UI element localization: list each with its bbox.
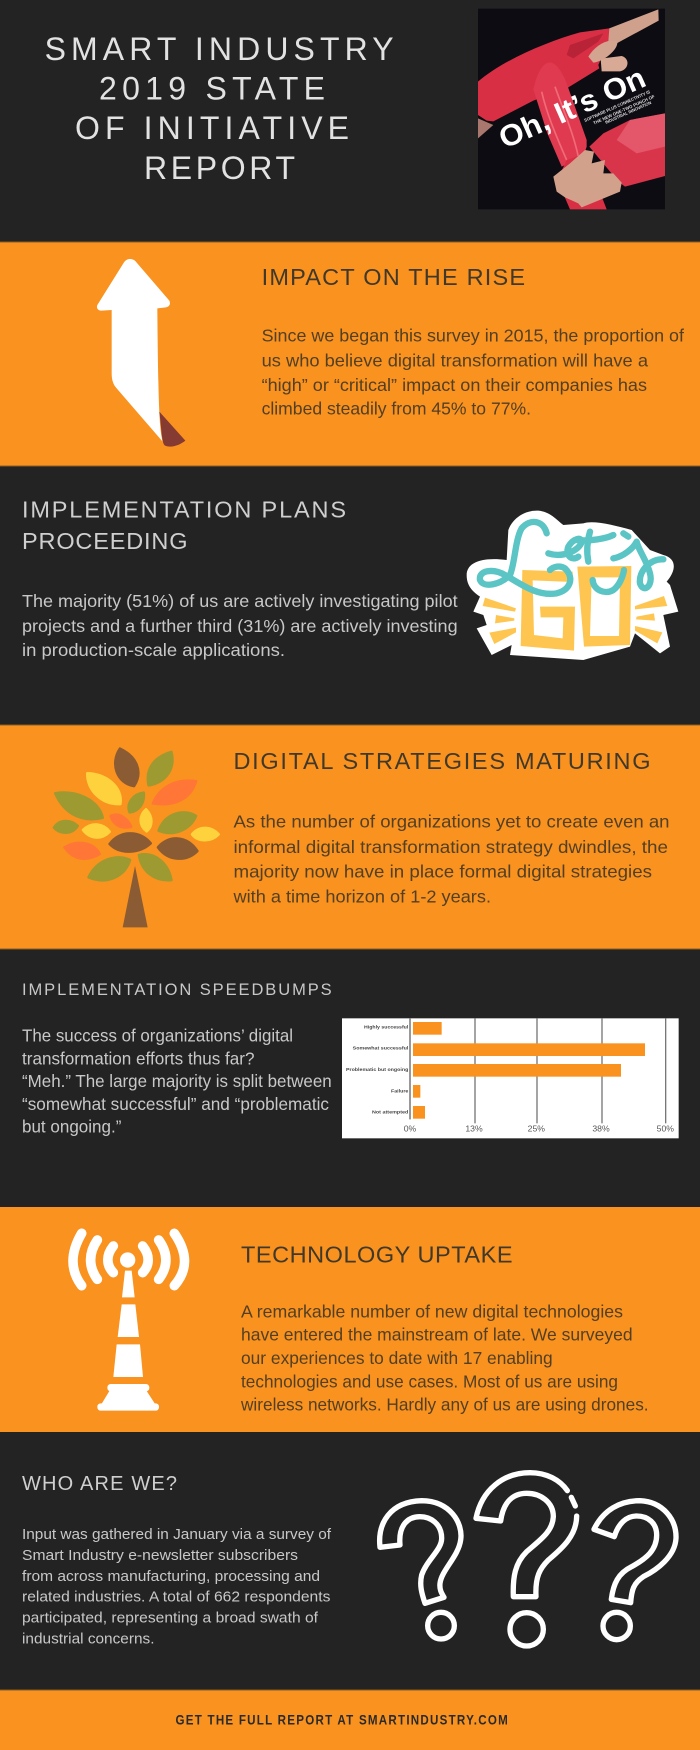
- footer text: GET THE FULL REPORT AT SMARTINDUSTRY.COM: [176, 1712, 509, 1728]
- bar chart: Failure: [391, 1089, 409, 1095]
- text block: projects and a further third (31%) are actively investing: [22, 616, 458, 636]
- text block: [22, 591, 458, 660]
- text block: transformation efforts thus far?: [22, 1048, 255, 1068]
- text block: industrial concerns.: [22, 1630, 154, 1647]
- heading: WHO ARE WE?: [22, 1473, 177, 1495]
- text block: Input was gathered in January via a survey of: [22, 1526, 332, 1543]
- heading: DIGITAL STRATEGIES MATURING: [234, 748, 650, 774]
- text block: [240, 1302, 649, 1415]
- heading: PROCEEDING: [22, 528, 188, 554]
- panel: who are we: [0, 1432, 700, 1690]
- heading: TECHNOLOGY UPTAKE: [241, 1242, 512, 1268]
- bar chart: Not attempted: [372, 1110, 408, 1116]
- text block: [232, 812, 670, 907]
- text block: our experiences to date with 17 enabling: [241, 1348, 553, 1368]
- icon: let's go sticker: [467, 511, 678, 660]
- heading: [22, 497, 346, 554]
- heading: IMPACT ON THE RISE: [262, 264, 525, 290]
- text block: technologies and use cases. Most of us are using: [241, 1371, 618, 1391]
- panel: implementation speedbumps: [0, 949, 700, 1207]
- text block: The success of organizations’ digital: [22, 1026, 293, 1046]
- magazine cover image: boxing hand wraps, Oh, It's On: Oh, It’s On: [494, 62, 651, 155]
- text block: Since we began this survey in 2015, the proportion of: [262, 326, 684, 346]
- bar chart: 25%: [528, 1123, 545, 1133]
- panel: implementation plans proceeding: [0, 466, 700, 725]
- icon: wireless tower: [73, 1233, 185, 1411]
- text block: A remarkable number of new digital technologies: [241, 1302, 623, 1322]
- panel: header: [0, 0, 700, 242]
- text block: from across manufacturing, processing and: [22, 1568, 320, 1585]
- bar chart: Problematic but ongoing: [346, 1067, 408, 1073]
- text block: [262, 326, 684, 419]
- text block: “Meh.” The large majority is split between: [22, 1071, 332, 1091]
- text block: in production-scale applications.: [22, 640, 285, 660]
- bar chart: 50%: [657, 1123, 674, 1133]
- panel: digital strategies maturing: [0, 725, 700, 949]
- text block: “somewhat successful” and “problematic: [22, 1094, 329, 1114]
- heading: IMPLEMENTATION PLANS: [22, 497, 346, 523]
- bar chart: [342, 1018, 679, 1138]
- text block: [22, 1026, 332, 1136]
- text block: Smart Industry e-newsletter subscribers: [22, 1547, 298, 1564]
- panel: technology uptake: [0, 1207, 700, 1432]
- text block: related industries. A total of 662 respondents: [22, 1589, 330, 1606]
- panel: impact on the rise: [0, 242, 700, 466]
- magazine cover image: boxing hand wraps, Oh, It's On: [478, 9, 665, 209]
- text block: “high” or “critical” impact on their companies has: [262, 375, 647, 395]
- text block: wireless networks. Hardly any of us are using drones.: [240, 1395, 649, 1415]
- magazine cover image: boxing hand wraps, Oh, It's On: INDUSTRIAL INNOVATION: [604, 100, 652, 125]
- title: SMART INDUSTRY: [45, 31, 394, 67]
- magazine cover image: boxing hand wraps, Oh, It's On: THE NEW ONE-TWO PUNCH OF: [592, 94, 656, 126]
- icon: up arrow: [97, 259, 185, 447]
- text block: but ongoing.”: [22, 1116, 122, 1136]
- text block: climbed steadily from 45% to 77%.: [262, 399, 531, 419]
- text block: us who believe digital transformation will have a: [262, 351, 648, 371]
- bar chart: Somewhat successful: [353, 1046, 409, 1052]
- icon: three question marks: [380, 1473, 676, 1646]
- text block: have entered the mainstream of late. We surveyed: [241, 1325, 633, 1345]
- heading: IMPLEMENTATION SPEEDBUMPS: [22, 981, 332, 999]
- bar chart: 38%: [592, 1123, 610, 1133]
- bar chart: 0%: [404, 1123, 417, 1133]
- magazine cover image: boxing hand wraps, Oh, It's On: SOFTWARE PLUS CONNECTIVITY IS: [583, 89, 651, 123]
- bar chart: 13%: [465, 1123, 483, 1133]
- text block: The majority (51%) of us are actively investigating pilot: [22, 591, 458, 611]
- text block: [22, 1526, 332, 1647]
- title: OF INITIATIVE: [75, 110, 349, 146]
- title: [45, 31, 394, 186]
- icon: autumn tree: [54, 749, 219, 927]
- title: REPORT: [144, 150, 295, 186]
- text block: As the number of organizations yet to create even an: [234, 812, 670, 832]
- panel: footer call to action: [0, 1690, 700, 1750]
- text block: participated, representing a broad swath of: [22, 1609, 319, 1626]
- text block: with a time horizon of 1-2 years.: [232, 887, 491, 907]
- text block: informal digital transformation strategy dwindles, the: [234, 837, 668, 857]
- bar chart: Highly successful: [364, 1025, 409, 1031]
- title: 2019 STATE: [99, 70, 325, 106]
- text block: majority now have in place formal digital strategies: [234, 862, 652, 882]
